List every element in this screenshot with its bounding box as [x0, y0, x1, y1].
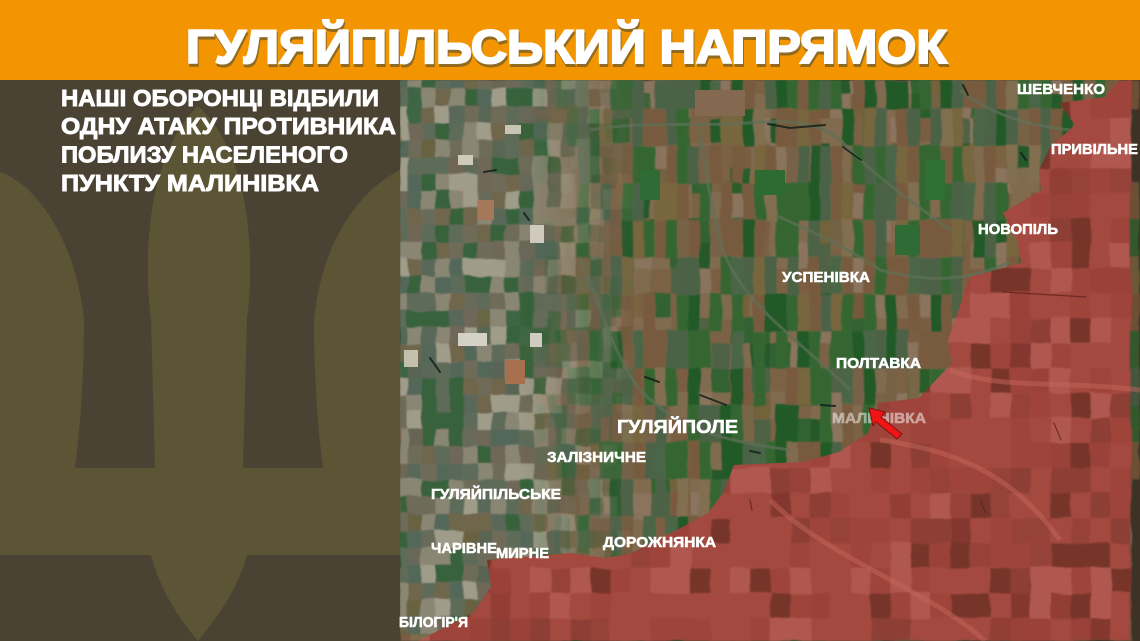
map label: Білогір'я: БІЛОГІР'Я — [399, 615, 468, 631]
text block: report: ПОБЛИЗУ НАСЕЛЕНОГО — [61, 142, 348, 168]
satellite map — [400, 80, 1140, 641]
map: dark ravines — [430, 85, 1026, 453]
text block: report: НАШІ ОБОРОНЦІ ВІДБИЛИ — [61, 85, 379, 111]
text block: report — [61, 85, 396, 196]
map: field strips — [400, 80, 1140, 641]
map label: Шевченко: ШЕВЧЕНКО — [1017, 82, 1105, 98]
map label: Гуляйполе: ГУЛЯЙПОЛЕ — [617, 416, 738, 437]
text block: report: ПУНКТУ МАЛИНІВКА — [61, 170, 319, 196]
title: ГУЛЯЙПІЛЬСЬКИЙ НАПРЯМОК — [186, 20, 947, 73]
map: farmland fields — [400, 80, 1140, 641]
map label: Мирне: МИРНЕ — [496, 546, 549, 562]
map label: Полтавка: ПОЛТАВКА — [836, 356, 922, 372]
map label: Дорожнянка: ДОРОЖНЯНКА — [603, 535, 717, 551]
left panel background — [0, 80, 400, 641]
map label: Малинівка: МАЛИНІВКА — [832, 411, 927, 427]
map label: Привільне: ПРИВІЛЬНЕ — [1051, 142, 1138, 158]
map label: Успенівка: УСПЕНІВКА — [782, 270, 871, 286]
map: tone overlay — [400, 80, 1140, 641]
header bar — [0, 0, 1140, 80]
map: valleys — [580, 90, 1070, 450]
map label: Залізничне: ЗАЛІЗНИЧНЕ — [547, 450, 646, 466]
text block: report: ОДНУ АТАКУ ПРОТИВНИКА — [61, 113, 396, 139]
map label: Гуляйпільське: ГУЛЯЙПІЛЬСЬКЕ — [431, 485, 561, 503]
map: pale and brown field patches — [404, 90, 945, 384]
map label: Чарівне: ЧАРІВНЕ — [431, 541, 497, 557]
map label: Новопіль: НОВОПІЛЬ — [978, 222, 1058, 238]
arrow: attack direction — [869, 408, 902, 439]
map: occupied territory overlay — [400, 80, 1140, 641]
trident emblem — [0, 106, 400, 641]
map: western grey fields — [400, 80, 630, 636]
